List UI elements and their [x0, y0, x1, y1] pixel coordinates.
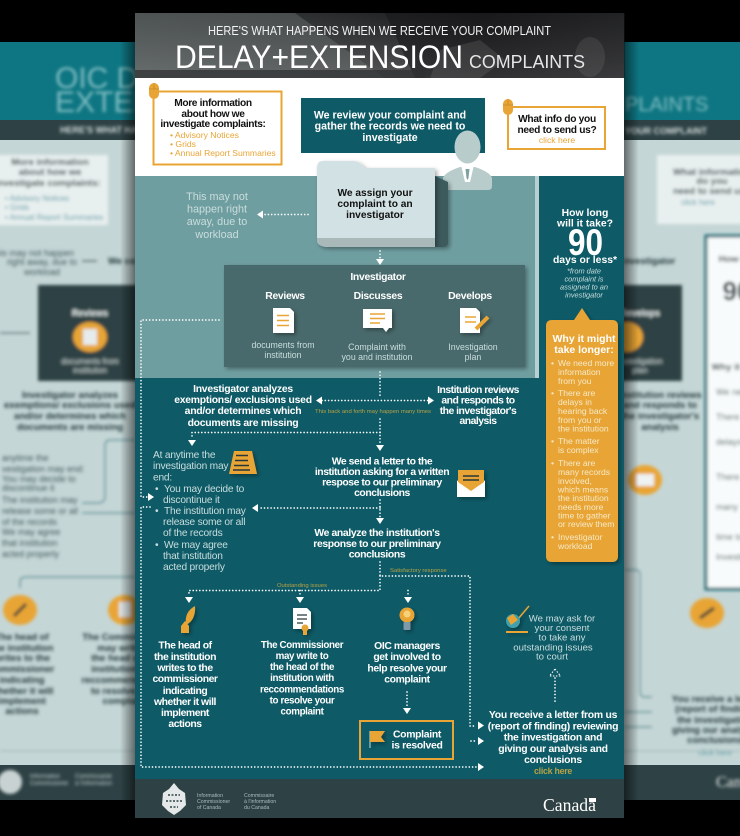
text: the head of the institution: commissioner [152, 674, 218, 685]
text: investigation may end: end: [153, 472, 172, 484]
label: satisfactory response: Satisfactory response [390, 568, 447, 574]
panel: we review your complaint: investigate [362, 132, 418, 144]
text: the commissioner may write: to resolve your [270, 696, 335, 706]
panel: we review your complaint: gather the records we need to [315, 120, 466, 132]
text: OIC managers: get involved to [373, 652, 441, 663]
text: investigation may end: • [155, 540, 159, 551]
left blurred poster content: documents are missing [17, 422, 123, 433]
text: investigation may end: • [155, 484, 159, 495]
text: the head of the institution: whether it will [153, 697, 217, 708]
left blurred poster content: Commissioner [30, 781, 68, 787]
text: institution reviews: analysis [459, 416, 497, 427]
text: the head of the institution: actions [168, 719, 202, 730]
text: investigator analyzes [174, 384, 312, 429]
text: investigation may end: • [155, 506, 159, 517]
right blurred poster content: plan [632, 366, 648, 375]
left blurred poster content: about how we [19, 167, 81, 178]
panel: investigator: you and institution [342, 352, 413, 362]
panel: more information: about how we [181, 109, 245, 120]
arrow: resolved to letter [471, 737, 484, 745]
panel: how long will it take: will it take? [556, 218, 613, 230]
icon: light bulb [400, 608, 414, 630]
text: the head of the institution: the institution [154, 652, 216, 663]
header subtitle: HERE'S WHAT HAPPENS WHEN WE RECEIVE YOUR COMPLAINT [208, 23, 551, 38]
text: the commissioner may write: reccommendations [260, 684, 345, 696]
text: investigation may end: that institution [163, 551, 223, 562]
right blurred poster content: do you [696, 176, 728, 187]
icon: document and pencil [460, 308, 488, 333]
icon: speech bubble [363, 309, 392, 332]
icon: quill [181, 606, 195, 633]
callout: complaint is resolved [360, 721, 453, 759]
panel: investigator: Investigation [448, 342, 498, 352]
text: investigator analyzes: exemptions/ exclusions used [174, 395, 312, 406]
text: OIC managers: complaint [384, 674, 431, 686]
text: we send a letter: conclusions [354, 488, 411, 499]
panel: what info: need to send us? [518, 125, 597, 136]
panel: how long will it take [553, 208, 618, 300]
text: you receive a letter: giving our analysis and [498, 744, 608, 755]
footer: french wordmark: du Canada [244, 805, 269, 811]
text: may not happen right away [186, 191, 248, 241]
text: you receive a letter: You receive a letter from us [489, 710, 618, 721]
right blurred poster content: the investigator's [621, 411, 699, 422]
callout: why it might take longer [546, 308, 618, 562]
dark teal process panel [135, 176, 624, 779]
footer: french wordmark: à l'information [244, 799, 276, 805]
left blurred poster content: actions [5, 706, 39, 717]
panel: investigator: Reviews [265, 291, 305, 302]
icon: checklist sign [229, 451, 257, 474]
left blurred poster content: vestigation may end: [2, 464, 85, 474]
text: we analyze: conclusions [349, 550, 406, 560]
callout: why it might take longer: • [551, 358, 554, 368]
panel: how long will it take: How long [562, 208, 608, 219]
callout: why it might take longer: Why it might [552, 333, 616, 345]
footer: Canada wordmark: Canada [543, 795, 596, 815]
text: you receive a letter: the investigation and [504, 732, 602, 744]
folder card [317, 161, 448, 247]
footer: english wordmark: Information [197, 793, 223, 799]
flow lines: letter to outcomes [252, 500, 384, 524]
text: we may ask for consent [513, 614, 596, 662]
panel: investigator: Investigator [350, 272, 406, 283]
text: we analyze: response to our preliminary [313, 539, 441, 550]
callout: why it might take longer: or review them [558, 519, 614, 529]
left blurred poster content: indicating [0, 675, 45, 686]
right blurred poster content: Institution reviews [618, 390, 702, 401]
text: the head of the institution: writes to the [156, 663, 213, 674]
main title: DELAY+EXTENSION [175, 39, 463, 75]
footer: english wordmark [197, 793, 230, 811]
footer band [135, 779, 624, 818]
left blurred poster content: • Advisory Notices [5, 194, 69, 203]
right blurred poster content: analysis [641, 422, 679, 433]
left blurred poster content: acted properly [2, 549, 60, 559]
text: institution reviews: and responds to [441, 396, 515, 406]
text: investigation may end: At anytime the [153, 450, 216, 461]
left blurred poster content: complaint [103, 696, 148, 707]
callout: why it might take longer: • [551, 388, 554, 398]
text: we may ask for consent: outstanding issues [513, 642, 593, 654]
callout: why it might take longer: is complex [558, 445, 599, 455]
panel: investigator: plan [465, 352, 481, 362]
footer: english wordmark: Commissioner [197, 799, 230, 805]
text: institution reviews: Institution reviews [437, 385, 520, 396]
callout: why it might take longer: from you [558, 376, 592, 386]
panel: we review your complaint: We review your complaint and [314, 110, 466, 122]
flow lines: to letter and to may-end [188, 419, 384, 451]
right blurred poster content: PLAINTS [625, 94, 708, 116]
text: investigator analyzes: documents are missing [188, 418, 298, 429]
left blurred poster content: • Annual Report Summaries [5, 213, 103, 222]
callout: why it might take longer: • [551, 458, 554, 468]
panel: what info: What info do you [518, 114, 596, 125]
panel: more information: More information [174, 98, 252, 109]
text: investigation may end: We may agree [164, 540, 228, 551]
arrow: folder to investigator [376, 251, 384, 265]
panel: more information: • Annual Report Summaries [170, 148, 276, 158]
folder card: complaint to an [337, 199, 413, 210]
note: back and forth: This back and forth may happen many times [315, 409, 431, 415]
text: we may ask for consent: your consent [535, 623, 590, 634]
text: OIC managers: help resolve your [367, 664, 447, 674]
left blurred poster content: the head of the [91, 653, 159, 664]
panel: what info [503, 99, 605, 149]
panel: we review your complaint [301, 98, 485, 153]
panel: more information [149, 83, 282, 164]
flow lines: back and forth [316, 372, 434, 404]
right blurred poster content: nvestigator [624, 256, 676, 267]
callout: why it might take longer: • [551, 532, 554, 542]
title suffix: COMPLAINTS [469, 52, 585, 72]
panel: investigator: Complaint with [348, 342, 406, 352]
text: may not happen right away: This may not [186, 191, 248, 203]
left blurred poster content: discontinue it [2, 483, 55, 493]
flow lines: outer left loop [141, 320, 484, 771]
left blurred poster content: to resolve your [91, 686, 159, 697]
panel: how long will it take: days or less* [553, 255, 618, 266]
left blurred poster content: The Commissioner [82, 632, 168, 643]
text: may not happen right away: workload [194, 229, 239, 241]
icon: flag [370, 731, 385, 748]
text: the commissioner may write: institution with [270, 673, 334, 684]
callout: why it might take longer: take longer: [554, 344, 614, 356]
text: you receive a letter: conclusions [524, 755, 582, 766]
callout: why it might take longer: • [551, 436, 554, 446]
left blurred poster content: Commissariat [75, 774, 112, 780]
text: institution reviews [437, 385, 520, 427]
icon: mouse [149, 83, 159, 99]
callout: why it might take longer: delays in [558, 397, 592, 407]
right blurred poster content: and responds to [623, 400, 697, 411]
arrow: to complaint resolved [403, 692, 411, 714]
left blurred poster content: may write to [97, 643, 153, 654]
panel: investigator [224, 265, 525, 367]
right blurred poster content: YOUR COMPLAINT [625, 126, 708, 136]
footer: french wordmark [244, 793, 276, 811]
callout: why it might take longer: There are [558, 458, 595, 468]
callout: why it might take longer: many records [558, 467, 610, 477]
right blurred poster content: click here [681, 198, 715, 207]
text: investigation may end [153, 450, 247, 573]
text: may not happen right away: happen right [187, 204, 247, 216]
text: we may ask for consent: to take any [539, 632, 586, 644]
left blurred poster content: and/or determines which [14, 411, 126, 422]
callout: complaint is resolved: is resolved [392, 740, 442, 752]
text: investigation may end: The institution may [164, 506, 247, 517]
icon: document [273, 308, 294, 333]
white intro band [135, 78, 624, 176]
text: OIC managers: OIC managers [374, 641, 440, 652]
text: investigation may end: acted properly [163, 562, 226, 573]
text: institution reviews: the investigator's [440, 406, 517, 417]
right blurred poster content: Investigation [618, 357, 662, 366]
callout: why it might take longer: the institution [558, 424, 609, 434]
panel: investigator: institution [264, 350, 302, 360]
footer: coat of arms [162, 783, 186, 815]
text: the head of the institution [152, 640, 218, 730]
left blurred poster content [0, 62, 169, 794]
left blurred poster content: institution with [91, 664, 159, 675]
callout: why it might take longer: information [558, 367, 601, 377]
left blurred poster content: documents from [61, 357, 119, 366]
icon: gavel [506, 606, 529, 633]
text: we send a letter: institution asking for a written [315, 467, 449, 478]
right blurred poster content: click here [698, 748, 732, 757]
callout: why it might take longer: time to gather [558, 510, 611, 520]
text: investigator analyzes: and/or determines which [185, 406, 301, 417]
flow lines: outstanding issues [185, 576, 412, 603]
left blurred poster content: The institution may [2, 495, 78, 505]
text: we send a letter [315, 456, 449, 499]
left blurred poster content: workload [23, 267, 60, 277]
text: the commissioner may write: complaint [281, 706, 325, 718]
text: we analyze: We analyze the institution's [314, 528, 440, 539]
left blurred poster content: We co [108, 256, 136, 267]
icon: mouse [503, 99, 513, 115]
right blurred poster content [609, 94, 740, 791]
callout: why it might take longer: needs more [558, 502, 604, 512]
callout: why it might take longer: the institution [558, 493, 609, 503]
text: we send a letter: respose to our preliminary [322, 478, 442, 488]
light teal assignment panel [135, 176, 535, 378]
panel divider [535, 176, 539, 378]
text: we may ask for consent: to court [536, 652, 568, 662]
callout: why it might take longer: which means [557, 484, 608, 494]
text: the head of the institution: indicating [163, 686, 207, 697]
panel: what info: click here [539, 135, 575, 145]
panel: investigator: Develops [448, 291, 492, 302]
text: we analyze [313, 528, 441, 560]
panel: investigator: documents from [251, 340, 315, 350]
left blurred poster content: right away, due to [7, 257, 77, 267]
text: we send a letter: We send a letter to the [332, 456, 433, 468]
text: investigator analyzes: Investigator analyzes [193, 384, 293, 395]
text: you receive a letter: (report of finding) reviewing [488, 722, 618, 732]
left blurred poster content: exemptions/ exclusions used [4, 400, 136, 411]
panel: more information: investigate complaints: [160, 119, 266, 130]
panel: how long will it take: complaint is [564, 274, 604, 284]
text: the commissioner may write: The Commissioner [261, 640, 344, 651]
panel: how long will it take: investigator [565, 290, 603, 300]
left blurred poster content: HERE'S WHAT HA [60, 125, 138, 135]
text: you receive a letter [488, 710, 618, 776]
left blurred poster content: Investigator analyzes [22, 390, 118, 401]
callout: why it might take longer: from you or [558, 415, 602, 425]
callout: why it might take longer: Investigator [558, 532, 603, 542]
footer: english wordmark: of Canada [197, 805, 221, 811]
left blurred poster content: More information [11, 157, 89, 168]
text: we may ask for consent: We may ask for [529, 614, 596, 624]
arrow: up to court [550, 669, 560, 702]
left blurred poster content: anytime the [2, 453, 49, 463]
left blurred poster content: You may decide to [2, 474, 76, 484]
text: investigation may end: of the records [163, 528, 223, 539]
left blurred poster content: that institution [2, 538, 58, 548]
callout: why it might take longer: The matter [558, 436, 600, 446]
left blurred poster content: release some or all [2, 506, 78, 516]
text: the commissioner may write [260, 640, 345, 718]
text: investigation may end: You may decide to [164, 484, 245, 495]
left blurred poster content: institution [73, 366, 107, 375]
text: the head of the institution: The head of [158, 640, 213, 652]
left blurred poster content: of the records [2, 517, 58, 527]
left blurred poster content: Information [30, 774, 60, 780]
panel: how long will it take: *from date [567, 266, 601, 276]
footer: french wordmark: Commissaire [244, 793, 274, 799]
text: investigation may end: release some or all [163, 517, 245, 528]
text: may not happen right away: away, due to [187, 216, 247, 228]
text: you receive a letter: click here [534, 766, 572, 776]
label: outstanding issues: Outstanding issues [277, 583, 327, 589]
panel: how long will it take: 90 [568, 222, 603, 263]
right blurred poster content: many [716, 502, 739, 512]
text: investigation may end: investigation may [153, 461, 229, 472]
callout: why it might take longer: hearing back [558, 406, 608, 416]
icon: certificate [293, 608, 311, 635]
folder card: investigator [346, 210, 404, 221]
icon: envelope [457, 470, 485, 497]
folder card: We assign your [337, 188, 413, 199]
text: the commissioner may write: the head of the [270, 662, 335, 673]
text: the commissioner may write: may write to [276, 651, 329, 662]
left blurred poster content: EXTEN [55, 86, 155, 119]
callout: why it might take longer: workload [557, 541, 593, 551]
left blurred poster content: • Grids [5, 203, 29, 212]
right blurred poster content: Develops [620, 308, 660, 318]
callout: why it might take longer: involved, [558, 476, 592, 486]
callout: why it might take longer: There are [558, 388, 595, 398]
callout: complaint is resolved: Complaint [393, 730, 442, 740]
left blurred poster content: Reviews [72, 308, 108, 318]
panel: more information: • Advisory Notices [170, 130, 239, 140]
text: the head of the institution: implement [161, 708, 210, 719]
icon: investigator person [443, 130, 492, 190]
arrow: to workload note [257, 210, 308, 218]
panel: investigator: Discusses [354, 291, 403, 302]
flow lines: satisfactory response [380, 562, 484, 730]
text: OIC managers [367, 641, 447, 686]
panel: how long will it take: assigned to an [560, 282, 608, 292]
panel: more information: • Grids [170, 139, 196, 149]
header banner [135, 13, 625, 78]
left blurred poster content: reccommendations [81, 675, 169, 686]
left blurred poster content: OIC DE [55, 62, 158, 95]
text: investigation may end: discontinue it [163, 495, 220, 506]
callout: why it might take longer: We need more [558, 358, 614, 368]
left blurred poster content: à l'information [75, 781, 112, 787]
left blurred poster content: We may agree [2, 527, 60, 537]
